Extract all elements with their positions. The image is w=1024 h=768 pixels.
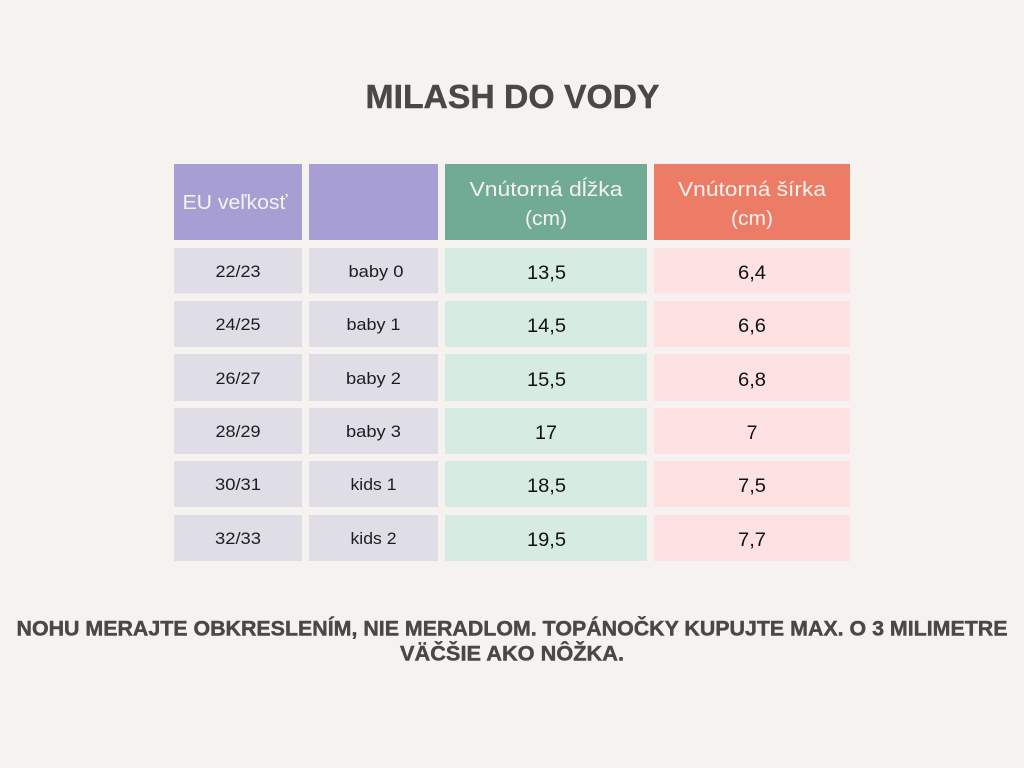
row: 24/25: 24/25 [216,316,260,334]
row: 32/33: 19,5 [527,529,566,551]
row: 22/23: 6,4 [738,262,766,284]
row: 32/33: 32/33 [215,530,261,548]
table header row [174,164,850,240]
row: 30/31: kids 1 [350,476,396,494]
row: 32/33: kids 2 [350,530,396,548]
row: 22/23: 22/23 [216,263,260,281]
row: 22/23 [174,248,850,294]
row: 22/23: 13,5 [527,262,566,284]
row: 26/27 [174,354,850,401]
size table [174,164,850,561]
row: 22/23: baby 0 [348,263,404,281]
row: 28/29: 7 [747,422,757,444]
row: 26/27: 26/27 [216,370,260,388]
header: empty model column [309,164,438,240]
row: 24/25 [174,301,850,347]
footer note: NOHU MERAJTE OBKRESLENÍM, NIE MERADLOM. TOPÁNOČKY KUPUJTE MAX. O 3 MILIMETRE [16,616,1008,640]
row: 26/27: baby 2 [346,370,401,388]
header: inner width: (cm) [731,208,773,230]
header: EU size: EU veľkosť [182,192,288,214]
row: 26/27: 6,8 [738,369,766,391]
row: 24/25: 6,6 [738,315,766,337]
row: 32/33: 7,7 [738,529,766,551]
row: 30/31: 18,5 [527,475,566,497]
footer note [16,616,1008,666]
header: EU size [174,164,302,240]
header: inner length [445,164,647,240]
row: 32/33 [174,515,850,561]
row: 30/31: 30/31 [215,476,261,494]
header: inner width: Vnútorná šírka [678,179,827,201]
row: 24/25: baby 1 [346,316,400,334]
header: inner length: (cm) [525,208,567,230]
row: 28/29: 17 [535,422,557,444]
row: 28/29 [174,408,850,454]
row: 26/27: 15,5 [527,369,566,391]
title: MILASH DO VODY [366,78,660,115]
header: inner length: Vnútorná dĺžka [470,177,624,201]
footer note: VÄČŠIE AKO NÔŽKA. [400,642,624,666]
header: inner width [654,164,850,240]
row: 24/25: 14,5 [527,315,566,337]
row: 30/31 [174,461,850,507]
row: 28/29: baby 3 [346,423,401,441]
row: 30/31: 7,5 [738,475,766,497]
row: 28/29: 28/29 [216,423,260,441]
